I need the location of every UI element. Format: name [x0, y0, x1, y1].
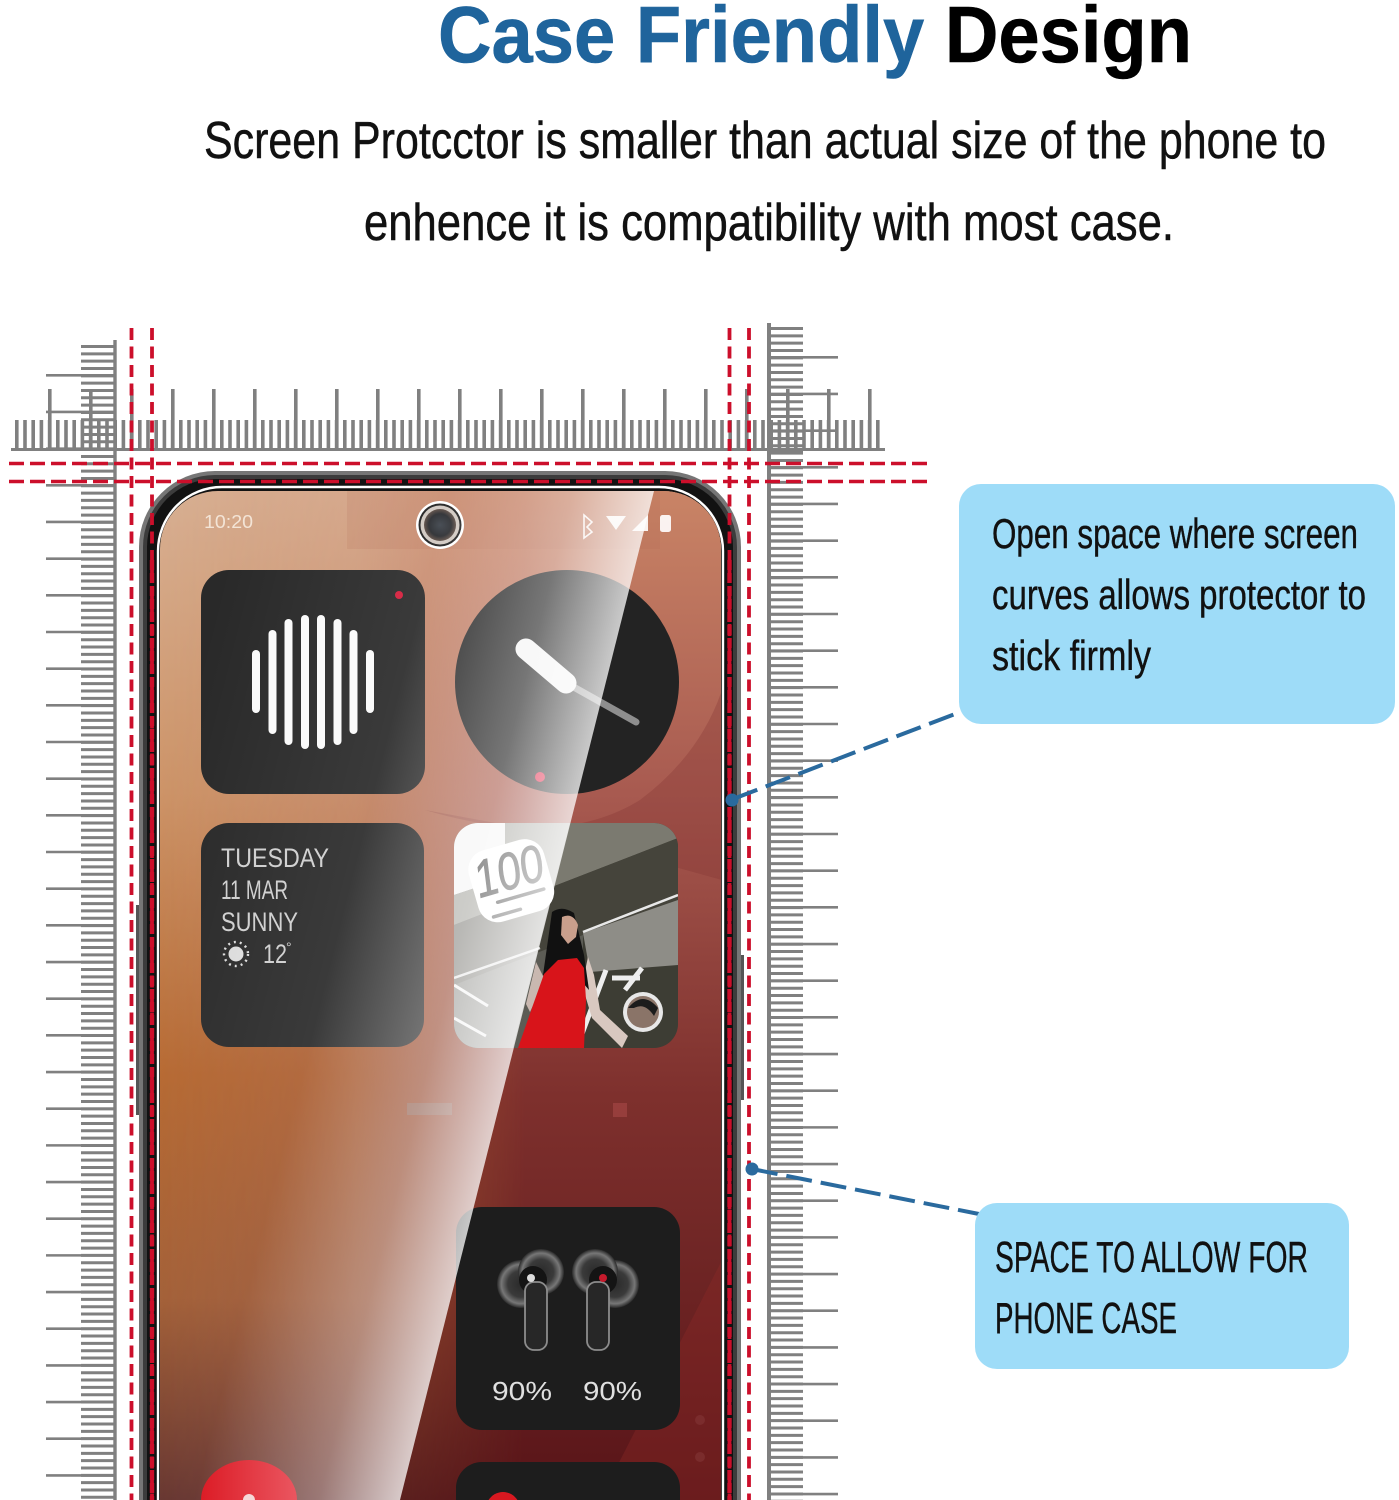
battery readings: 90%: [492, 1376, 552, 1406]
icon: sun: [224, 942, 248, 966]
screen: [160, 490, 722, 1500]
camera: [416, 501, 464, 549]
callout: space for phone case: PHONE CASE: [995, 1294, 1177, 1343]
faint dock placeholders: [407, 1103, 705, 1462]
widget: date and weather: SUNNY: [221, 907, 298, 937]
avatar sticker: [623, 992, 663, 1032]
red dashed guide lines: [9, 328, 930, 1500]
sticker: 100: 100: [467, 834, 550, 910]
widget: date and weather: TUESDAY: [221, 843, 329, 873]
widget: sound bars: [201, 570, 425, 794]
widget: clock: [455, 570, 679, 794]
side buttons: [136, 905, 744, 1115]
photo background building: [454, 823, 505, 895]
status time: 10:20: [204, 512, 253, 532]
battery readings: 90%: [583, 1376, 642, 1406]
subtitle text block: enhence it is compatibility with most case.: [364, 194, 1174, 252]
horizontal ruler: [11, 419, 885, 450]
widget: photo: [454, 823, 678, 1048]
arrow: callout 2 leader: [746, 1162, 979, 1214]
left vertical ruler: [80, 340, 115, 1500]
red round button: [201, 1460, 297, 1500]
status icons: [584, 515, 671, 538]
battery readings: [493, 1382, 641, 1400]
woman in red dress: [518, 909, 628, 1048]
photo glass lightening: [454, 823, 570, 1048]
widget: date and weather: 12: [263, 939, 287, 969]
callout: open space: stick firmly: [992, 632, 1151, 679]
wallpaper: [160, 490, 722, 1500]
widget: date and weather: [201, 823, 424, 1047]
sticker: 100: [473, 839, 554, 922]
icon: left earbud: [497, 1249, 564, 1350]
glass glare reflection: [160, 491, 654, 1500]
phone: [136, 471, 744, 1500]
right vertical ruler: [769, 323, 804, 1500]
subtitle text block: [204, 112, 1326, 252]
arrow: callout 1 leader: [726, 714, 955, 806]
callout: space for phone case: [975, 1203, 1349, 1369]
widget: date and weather: 11 MAR: [221, 875, 288, 905]
callout: open space: [959, 484, 1395, 724]
phone body frame: [139, 471, 741, 1500]
widget: earbuds: [456, 1207, 680, 1430]
icon: right earbud: [572, 1249, 639, 1350]
widget: bottom right: [456, 1462, 680, 1500]
white screen edge line: [158, 487, 723, 1500]
widget: date and weather: °: [286, 939, 292, 955]
